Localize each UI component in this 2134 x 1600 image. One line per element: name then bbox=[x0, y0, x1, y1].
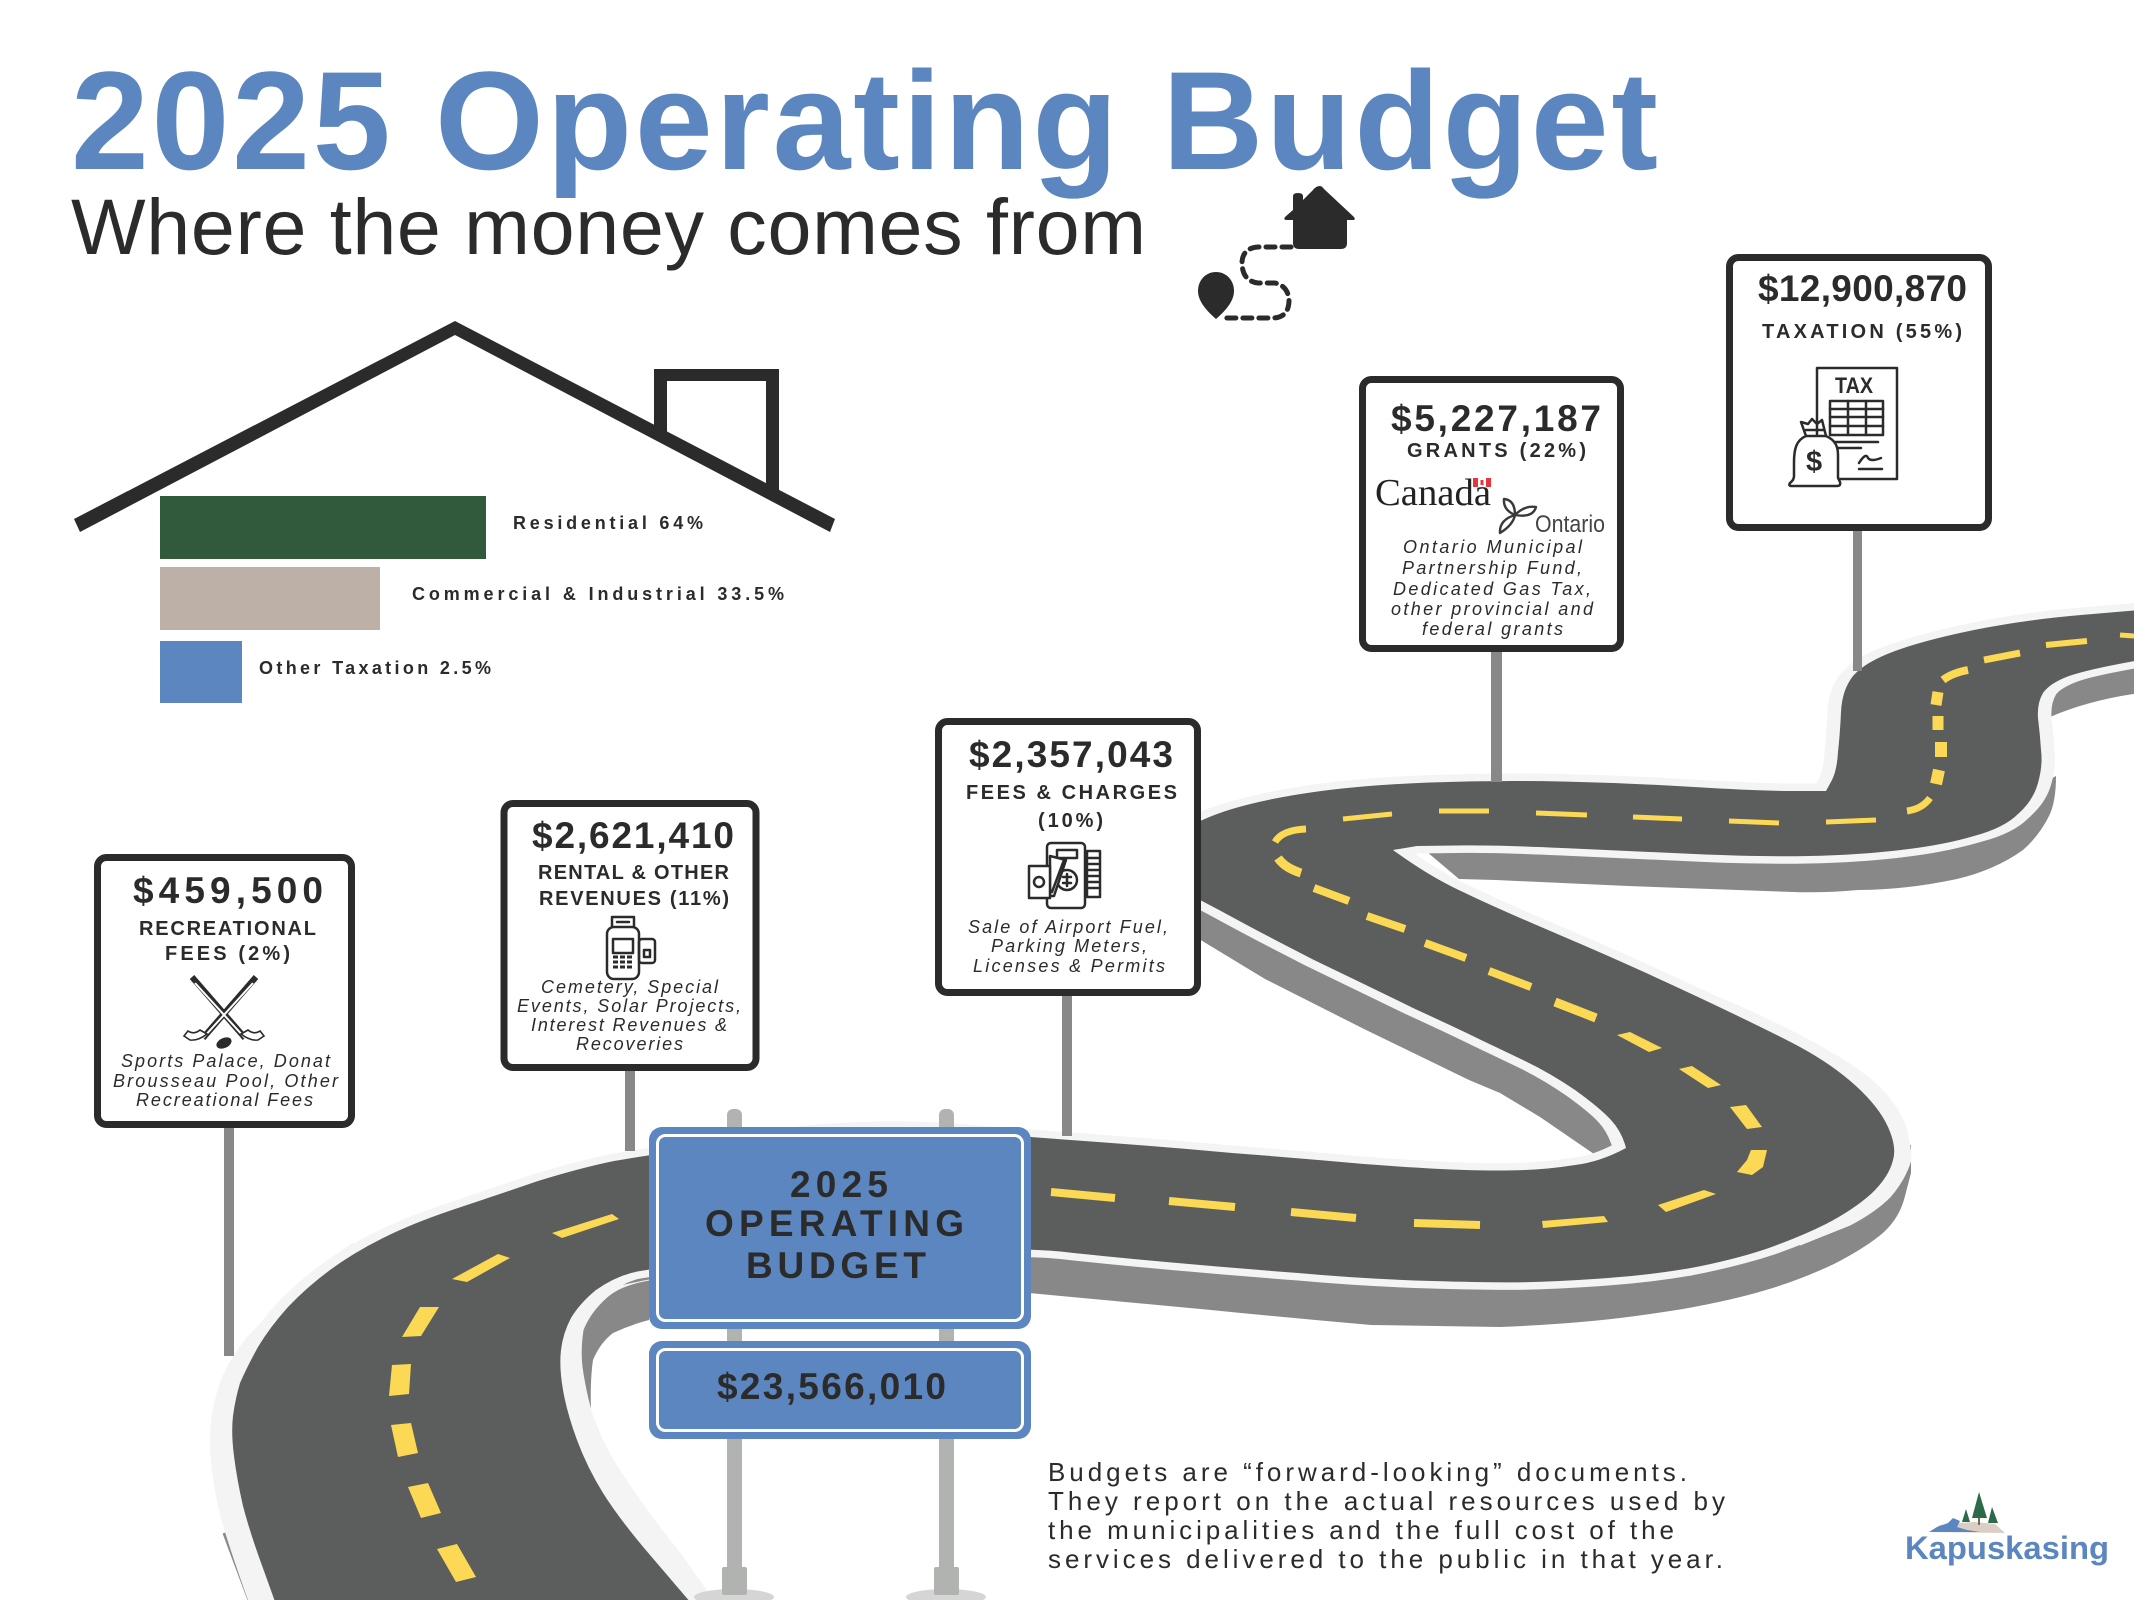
roof outline bbox=[74, 321, 835, 532]
amount: $2,621,410 bbox=[532, 815, 734, 856]
description: Licenses & Permits bbox=[973, 956, 1165, 976]
map pin bbox=[1198, 272, 1234, 319]
heading: GRANTS (22%) bbox=[1407, 440, 1586, 462]
logo: Ontario bbox=[1500, 499, 1605, 538]
description bbox=[1391, 537, 1594, 639]
logo: Canada: Canada bbox=[1375, 472, 1491, 514]
description: Recoveries bbox=[576, 1034, 683, 1054]
road surface bbox=[232, 610, 2134, 1600]
description: Recreational Fees bbox=[136, 1090, 313, 1110]
amount: $12,900,870 bbox=[1758, 268, 1967, 309]
sign posts bbox=[694, 1109, 986, 1600]
amount: $5,227,187 bbox=[1391, 398, 1601, 439]
sign heading bbox=[705, 1164, 964, 1286]
heading: FEES (2%) bbox=[165, 943, 290, 965]
main sign: total budget bbox=[649, 1109, 1031, 1600]
pole bbox=[1491, 650, 1502, 782]
sign heading: BUDGET bbox=[746, 1245, 926, 1286]
heading bbox=[966, 782, 1177, 832]
panel: title bbox=[649, 1127, 1031, 1329]
amount: $459,500 bbox=[133, 870, 323, 911]
icon: tax form and money bag bbox=[1789, 368, 1897, 486]
road shoulder bbox=[210, 605, 2134, 1600]
chimney bbox=[654, 369, 779, 496]
dashed route bbox=[1225, 247, 1291, 318]
heading bbox=[139, 918, 316, 965]
icon: route to home bbox=[1198, 186, 1355, 319]
logo: Kapuskasing bbox=[1905, 1492, 2109, 1566]
panel bbox=[98, 858, 352, 1124]
heading: TAXATION (55%) bbox=[1762, 321, 1962, 343]
description: Ontario Municipal bbox=[1403, 537, 1583, 557]
sign heading: 2025 bbox=[790, 1164, 888, 1205]
pole bbox=[1853, 529, 1862, 671]
description: Sports Palace, Donat bbox=[121, 1051, 331, 1071]
description: Parking Meters, bbox=[991, 936, 1147, 956]
panel: total amount bbox=[649, 1341, 1031, 1439]
description bbox=[517, 977, 741, 1054]
pole bbox=[625, 1069, 635, 1151]
sign: grants bbox=[1362, 380, 1620, 782]
logo: Ontario: Ontario bbox=[1535, 511, 1605, 538]
icon: tax form and money bag: $ bbox=[1806, 446, 1822, 478]
heading: (10%) bbox=[1038, 810, 1103, 832]
description: Dedicated Gas Tax, bbox=[1393, 579, 1591, 599]
road bbox=[210, 605, 2134, 1600]
description bbox=[113, 1051, 339, 1110]
heading: RECREATIONAL bbox=[139, 918, 316, 940]
panel bbox=[504, 804, 756, 1068]
sign: taxation bbox=[1730, 258, 1988, 671]
description: Partnership Fund, bbox=[1402, 558, 1582, 578]
description: Events, Solar Projects, bbox=[517, 996, 741, 1016]
total amount: $23,566,010 bbox=[717, 1366, 946, 1407]
label: commercial and industrial: Commercial & Industrial 33.5% bbox=[412, 584, 784, 604]
sign heading: OPERATING bbox=[705, 1203, 964, 1244]
note about budgets bbox=[1048, 1457, 1725, 1574]
heading: FEES & CHARGES bbox=[966, 782, 1177, 804]
pole bbox=[1062, 994, 1072, 1136]
panel bbox=[1362, 380, 1620, 648]
icon: money and percent bbox=[1029, 843, 1100, 908]
description: Sale of Airport Fuel, bbox=[968, 917, 1168, 937]
title: 2025 Operating Budget bbox=[71, 42, 1658, 199]
subtitle: Where the money comes from bbox=[71, 182, 1146, 271]
logo wordmark: Kapuskasing bbox=[1905, 1530, 2109, 1566]
icon: tax form and money bag: TAX bbox=[1835, 373, 1873, 398]
label: residential: Residential 64% bbox=[513, 513, 703, 533]
heading: RENTAL & OTHER bbox=[538, 862, 730, 884]
description: other provincial and bbox=[1391, 599, 1594, 619]
bar: commercial and industrial bbox=[160, 567, 380, 630]
description bbox=[968, 917, 1168, 976]
heading: REVENUES (11%) bbox=[539, 888, 729, 910]
description: Interest Revenues & bbox=[531, 1015, 727, 1035]
house bbox=[1284, 186, 1355, 249]
heading bbox=[538, 862, 730, 910]
panel bbox=[1730, 258, 1988, 528]
description: Cemetery, Special bbox=[541, 977, 719, 997]
sign: rental and other revenues bbox=[504, 804, 756, 1151]
note about budgets: They report on the actual resources used by bbox=[1048, 1486, 1725, 1516]
note about budgets: the municipalities and the full cost of the bbox=[1048, 1515, 1674, 1545]
road centre line dashes bbox=[389, 635, 2134, 1582]
label: other taxation: Other Taxation 2.5% bbox=[259, 658, 491, 678]
bar: other taxation bbox=[160, 641, 242, 703]
sign: recreational fees bbox=[98, 858, 352, 1356]
icon: hockey sticks bbox=[184, 977, 264, 1051]
logo trees and rocks bbox=[1929, 1492, 2005, 1533]
note about budgets: services delivered to the public in that year. bbox=[1048, 1544, 1723, 1574]
road side shading bbox=[224, 655, 2134, 1600]
amount: $2,357,043 bbox=[969, 734, 1173, 775]
pole bbox=[224, 1128, 234, 1356]
roof with tax class bars bbox=[74, 321, 835, 703]
bar: residential bbox=[160, 496, 486, 559]
sign: fees and charges bbox=[938, 722, 1198, 1136]
description: Brousseau Pool, Other bbox=[113, 1071, 339, 1091]
note about budgets: Budgets are “forward-looking” documents. bbox=[1048, 1457, 1687, 1487]
icon: payment terminal bbox=[607, 917, 655, 979]
panel bbox=[938, 722, 1198, 992]
description: federal grants bbox=[1422, 619, 1563, 639]
